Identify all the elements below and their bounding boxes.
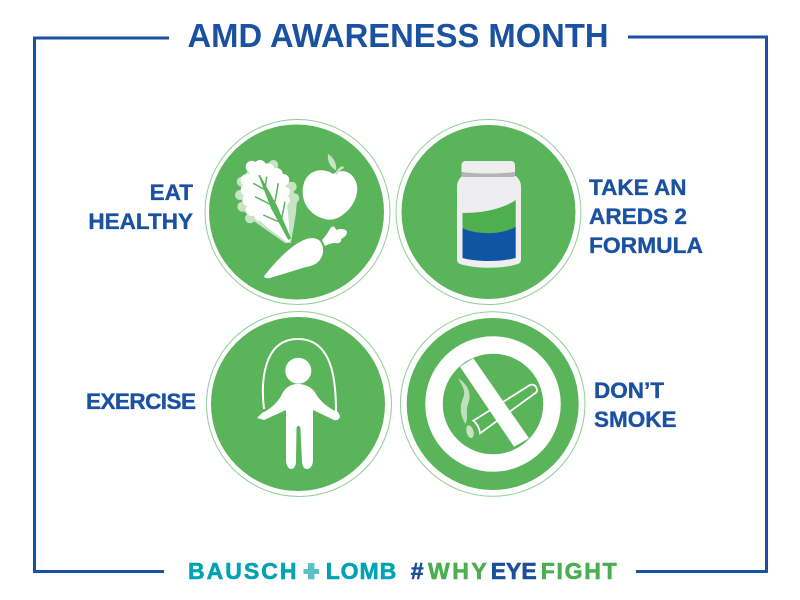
label: eat healthy: EAT — [150, 180, 193, 205]
label: don't smoke: DON’T — [594, 378, 664, 403]
label: take an AREDS 2 formula: FORMULA — [589, 233, 703, 258]
icon: no smoking — [434, 345, 552, 463]
label: eat healthy: HEALTHY — [88, 209, 193, 234]
icon: supplement jar — [457, 161, 521, 268]
panel: exercise — [86, 312, 392, 496]
label: don't smoke — [594, 378, 677, 432]
logo: bausch + lomb: BAUSCH — [188, 558, 296, 584]
logo: bausch + lomb: LOMB — [326, 558, 396, 584]
label: take an AREDS 2 formula: TAKE AN — [589, 175, 686, 200]
icon: food — [235, 154, 357, 278]
hashtag: WHY — [428, 558, 487, 584]
label: eat healthy — [88, 180, 193, 234]
label: take an AREDS 2 formula: AREDS 2 — [589, 204, 687, 229]
logo: bausch + lomb — [188, 558, 396, 584]
panel: eat healthy — [88, 120, 390, 304]
label: take an AREDS 2 formula — [589, 175, 703, 258]
hashtag: FIGHT — [541, 558, 617, 584]
hashtag: EYE — [491, 558, 537, 584]
panel: AREDS formula — [396, 120, 703, 304]
label: exercise: EXERCISE — [86, 389, 196, 414]
label: don't smoke: SMOKE — [594, 407, 677, 432]
hashtag — [411, 558, 617, 584]
hashtag: # — [411, 558, 424, 584]
icon: jump rope figure — [257, 339, 340, 469]
title: AMD AWARENESS MONTH — [188, 17, 608, 54]
panel: don't smoke — [400, 312, 677, 496]
